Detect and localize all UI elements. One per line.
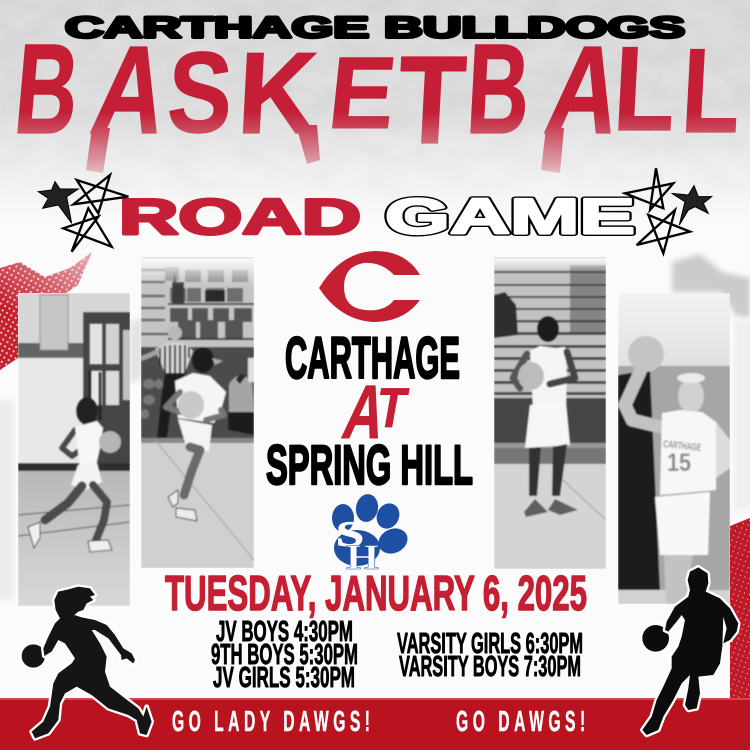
photo: girl with ball and referee [141, 257, 254, 568]
heading: Basketball [17, 44, 736, 173]
red paint patch: right [730, 518, 750, 698]
icon: right stars [625, 168, 712, 253]
footer slogan: Go Dawgs: GO DAWGS! [456, 705, 585, 737]
heading: Carthage Bulldogs: CARTHAGE BULLDOGS [65, 12, 685, 44]
footer band [0, 698, 750, 750]
logo: Spring Hill paw [332, 492, 412, 577]
subheading: Road Game: GAME [385, 188, 635, 244]
red paint patch: left [0, 252, 92, 370]
heading: Basketball: B [464, 18, 533, 161]
heading: Basketball: L [679, 23, 744, 157]
schedule: left column [211, 616, 358, 694]
icon: left stars [38, 175, 128, 252]
logo: Carthage C [319, 251, 420, 322]
subheading: Road Game: GAME [385, 188, 635, 244]
schedule: left column: 9TH BOYS 5:30PM [211, 639, 358, 671]
silhouette: boy dribbling [642, 567, 738, 735]
schedule: right column: VARSITY BOYS 7:30PM [399, 651, 581, 683]
matchup: At: T [372, 378, 412, 440]
silhouette: girl dribbling [22, 587, 152, 738]
photo: boy number 15 raising ball: CARTHAGE [663, 439, 702, 454]
photo: boy number 15 raising ball [618, 293, 730, 604]
matchup: At: A [336, 370, 394, 455]
heading: Basketball: K [235, 28, 321, 158]
logo: Spring Hill paw: S [336, 514, 364, 554]
heading: Basketball: A [537, 21, 633, 161]
heading: Basketball: B [10, 18, 84, 161]
heading: Basketball: S [165, 29, 235, 157]
subheading: Road Game: ROAD [119, 189, 361, 245]
heading: Basketball: T [395, 29, 469, 170]
schedule: left column: JV BOYS 4:30PM [216, 616, 353, 648]
logo: Spring Hill paw: H [346, 537, 379, 577]
matchup: Carthage: CARTHAGE [285, 326, 460, 391]
heading: Basketball: L [611, 23, 679, 156]
photo: boy holding ball in stands [494, 257, 606, 569]
schedule: left column: JV GIRLS 5:30PM [213, 662, 355, 694]
footer slogan: Go Lady Dawgs: GO LADY DAWGS! [172, 705, 370, 737]
photo: boy number 15 raising ball: 15 [667, 449, 691, 477]
photo: girl dribbling in gym [18, 293, 130, 606]
schedule: right column [397, 628, 583, 683]
heading: Basketball: E [324, 36, 401, 150]
schedule: right column: VARSITY GIRLS 6:30PM [397, 628, 583, 660]
heading: Basketball: A [83, 21, 179, 161]
subheading: Road Game [119, 188, 635, 245]
matchup: Spring Hill: SPRING HILL [266, 433, 473, 496]
